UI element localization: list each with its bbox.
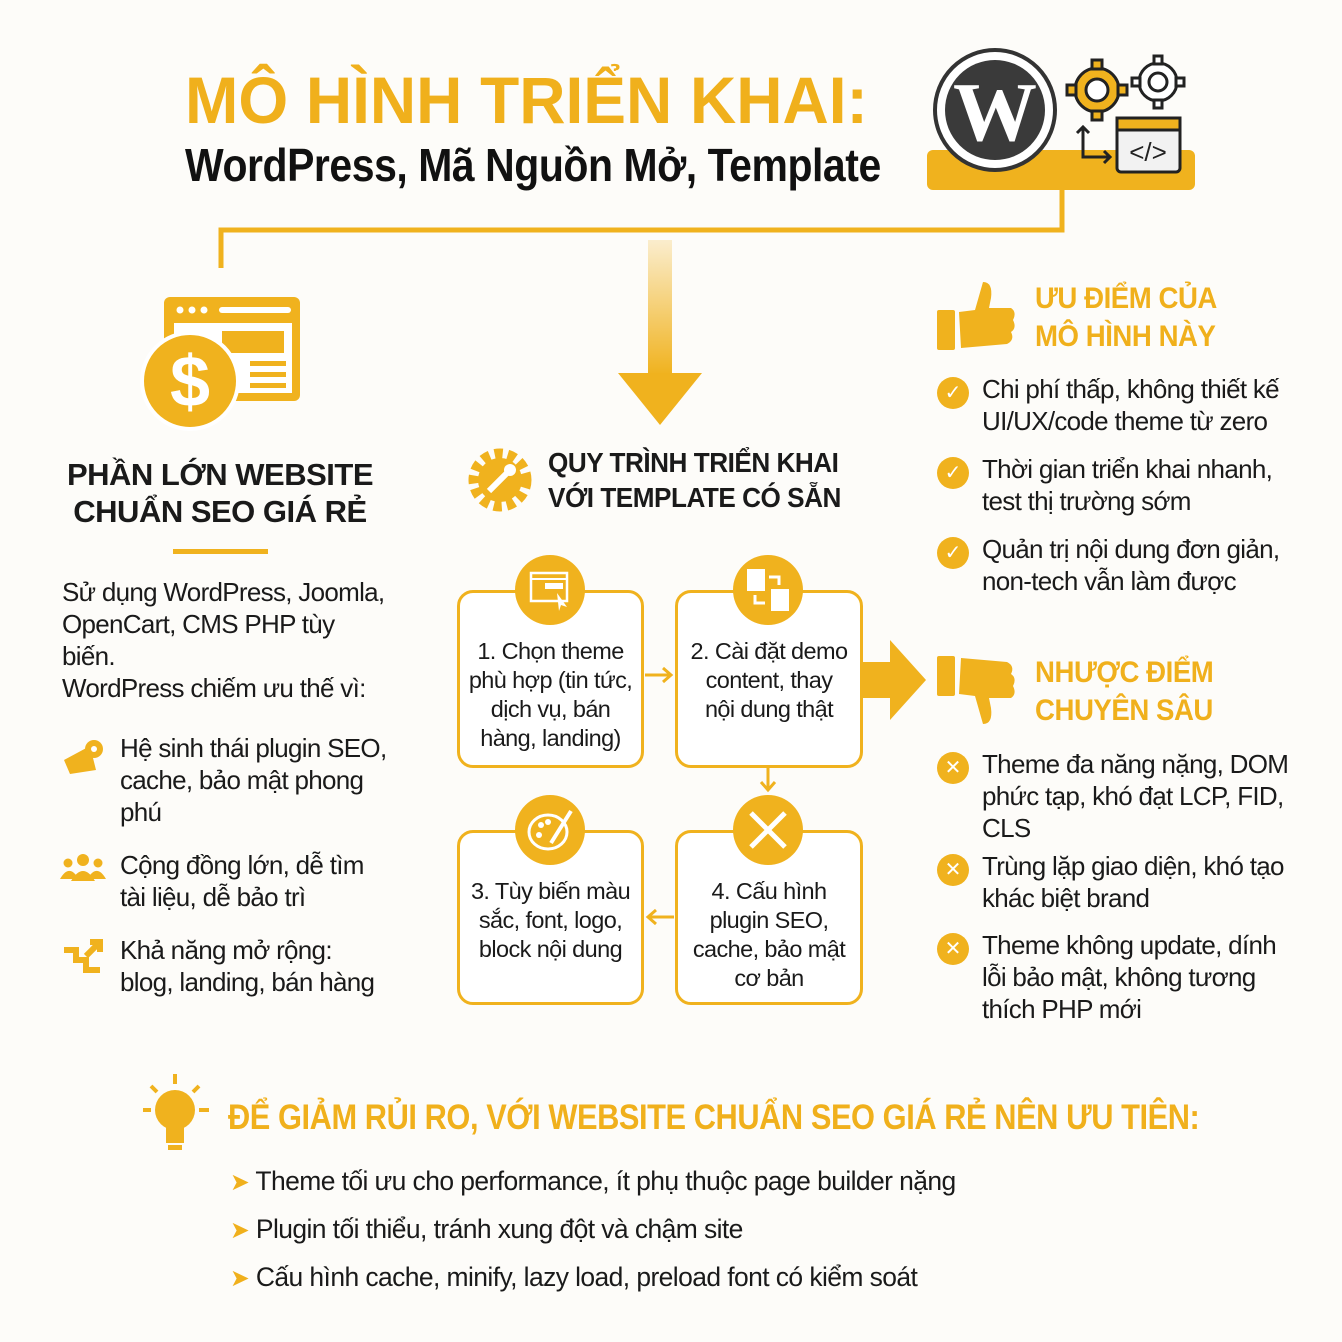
- cons heading: NHƯỢC ĐIỂM: [1035, 656, 1213, 689]
- left paragraph: WordPress chiếm ưu thế vì:: [62, 673, 366, 703]
- bottom bullets: ➤ Theme tối ưu cho performance, ít phụ thuộc page builder nặng: [230, 1166, 956, 1196]
- bullet 2: [60, 850, 364, 912]
- step 2: [675, 590, 863, 768]
- bullet 1: Hệ sinh thái plugin SEO,: [120, 733, 386, 763]
- step 1: hàng, landing): [480, 725, 621, 751]
- step 3: 3. Tùy biến màu: [471, 878, 630, 904]
- center heading: VỚI TEMPLATE CÓ SẴN: [548, 482, 841, 513]
- left paragraph: OpenCart, CMS PHP tùy: [62, 609, 334, 639]
- cons items: CLS: [982, 813, 1030, 843]
- pros items: ✓: [945, 542, 961, 564]
- connector line: [218, 190, 1064, 268]
- bottom bullets: ➤ Cấu hình cache, minify, lazy load, preload font có kiểm soát: [230, 1262, 917, 1292]
- center heading: [468, 447, 841, 513]
- pros items: [937, 374, 1280, 596]
- bottom section: [143, 1074, 1199, 1292]
- cons heading: CHUYÊN SÂU: [1035, 694, 1213, 727]
- cons items: khác biệt brand: [982, 883, 1149, 913]
- pros items: Chi phí thấp, không thiết kế: [982, 374, 1279, 404]
- pros items: ✓: [945, 462, 961, 484]
- header graphic: wordpress, gears, code: </>: [1129, 137, 1167, 167]
- step arrows: [645, 667, 674, 684]
- pros items: non-tech vẫn làm được: [982, 566, 1236, 596]
- arrow: down: [618, 240, 702, 425]
- cons items: phức tạp, khó đạt LCP, FID,: [982, 781, 1284, 811]
- step icons: [515, 555, 585, 625]
- step 1: [457, 590, 644, 768]
- step 1: 1. Chọn theme: [477, 638, 624, 664]
- pros heading: [1035, 282, 1217, 353]
- step 2: 2. Cài đặt demo: [691, 638, 847, 664]
- cons items: Theme đa năng nặng, DOM: [982, 749, 1288, 779]
- bullet 2: Cộng đồng lớn, dễ tìm: [120, 850, 364, 880]
- left paragraph: [62, 577, 384, 703]
- title: [185, 63, 881, 191]
- bullet 1: cache, bảo mật phong: [120, 765, 363, 795]
- left bullets: [60, 733, 386, 997]
- left heading: PHẦN LỚN WEBSITE: [67, 457, 373, 492]
- icon: thumbs up: [937, 282, 1015, 350]
- panel: pros: [937, 282, 1280, 596]
- pros items: Thời gian triển khai nhanh,: [982, 454, 1272, 484]
- arrow: right: [863, 640, 926, 720]
- panel: cons: [937, 656, 1288, 1024]
- bullet 3: blog, landing, bán hàng: [120, 967, 374, 997]
- cons items: Trùng lặp giao diện, khó tạo: [982, 851, 1284, 881]
- pros items: Quản trị nội dung đơn giản,: [982, 534, 1279, 564]
- left heading: [67, 457, 373, 529]
- step 4: 4. Cấu hình: [712, 878, 826, 904]
- title line 1: MÔ HÌNH TRIỂN KHAI:: [185, 63, 868, 137]
- step 2: content, thay: [706, 667, 832, 693]
- icon: lightbulb: [143, 1074, 209, 1150]
- cons items: lỗi bảo mật, không tương: [982, 962, 1256, 992]
- bullet 3: Khả năng mở rộng:: [120, 935, 332, 965]
- step 4: plugin SEO,: [710, 907, 828, 933]
- step 3: [457, 830, 644, 1005]
- left heading: CHUẨN SEO GIÁ RẺ: [73, 494, 367, 529]
- pros items: UI/UX/code theme từ zero: [982, 406, 1267, 436]
- step 4: cơ bản: [734, 965, 804, 991]
- title line 2: WordPress, Mã Nguồn Mở, Template: [185, 139, 881, 191]
- pros items: ✓: [945, 382, 961, 404]
- bottom bullets: ➤ Plugin tối thiểu, tránh xung đột và chậm site: [230, 1214, 743, 1244]
- header graphic: wordpress, gears, code: [927, 48, 1195, 190]
- icon: thumbs down: [937, 656, 1015, 724]
- cons items: ✕: [945, 859, 961, 881]
- pros heading: ƯU ĐIỂM CỦA: [1035, 282, 1217, 315]
- cons heading: [1035, 656, 1213, 727]
- step 4: [675, 830, 863, 1005]
- center heading: QUY TRÌNH TRIỂN KHAI: [548, 447, 838, 478]
- left paragraph: Sử dụng WordPress, Joomla,: [62, 577, 384, 607]
- cons items: thích PHP mới: [982, 994, 1141, 1024]
- step 1: phù hợp (tin tức,: [469, 667, 632, 693]
- bottom heading: ĐỂ GIẢM RỦI RO, VỚI WEBSITE CHUẨN SEO GIÁ RẺ NÊN ƯU TIÊN:: [228, 1098, 1199, 1137]
- bullet 3: [64, 935, 374, 997]
- cons items: [937, 749, 1288, 1024]
- bullet 2: tài liệu, dễ bảo trì: [120, 882, 305, 912]
- step 4: cache, bảo mật: [693, 936, 845, 962]
- step 3: sắc, font, logo,: [479, 907, 622, 933]
- cons items: ✕: [945, 757, 961, 779]
- step 3: block nội dung: [479, 936, 622, 962]
- pros items: test thị trường sớm: [982, 486, 1191, 516]
- cons items: ✕: [945, 938, 961, 960]
- icon: gear wrench: [468, 448, 532, 512]
- bullet 1: [64, 733, 386, 827]
- bullet 1: phú: [120, 797, 161, 827]
- step 2: nội dung thật: [705, 696, 833, 722]
- left paragraph: biến.: [62, 641, 115, 671]
- icon: website with dollar: $: [170, 342, 210, 422]
- step 1: dịch vụ, bán: [491, 696, 610, 722]
- cons items: Theme không update, dính: [982, 930, 1276, 960]
- icon: website with dollar: [144, 297, 300, 427]
- header graphic: wordpress, gears, code: W: [953, 66, 1037, 159]
- pros heading: MÔ HÌNH NÀY: [1035, 320, 1215, 353]
- bottom bullets: [230, 1166, 956, 1292]
